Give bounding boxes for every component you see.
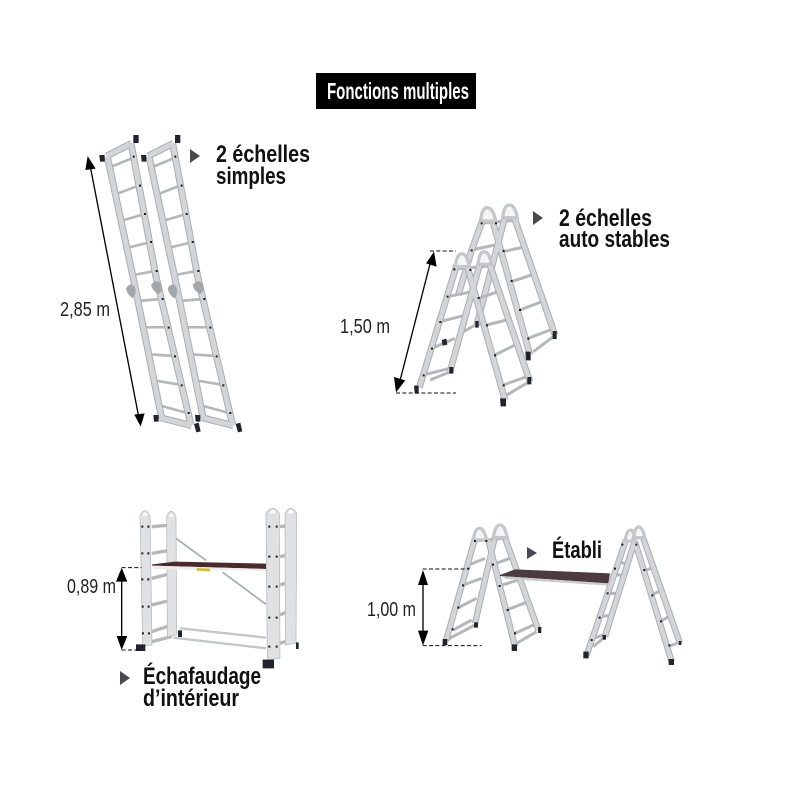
panel: échafaudage d'intérieur xyxy=(116,508,299,668)
panel: 2 échelles simples xyxy=(85,135,242,432)
dimension: 1,00 m: 1,00 m xyxy=(367,599,416,621)
dimension: 1,50 m: 1,50 m xyxy=(340,316,390,338)
label: 2 échelles auto stables xyxy=(533,205,670,253)
label: 2 échelles auto stables: 2 échelles xyxy=(559,205,652,232)
ladder one xyxy=(99,135,201,432)
icon: scaffold xyxy=(136,508,299,668)
arrow: height 2,85 m xyxy=(85,156,145,427)
label: Échafaudage d'intérieur: d’intérieur xyxy=(143,685,239,712)
label: Échafaudage d'intérieur xyxy=(120,662,261,712)
label: Établi xyxy=(527,536,602,564)
label: 2 échelles simples: simples xyxy=(216,163,286,190)
icon: back A-frame ladder xyxy=(458,205,557,360)
icon: right A-frame ladder xyxy=(583,527,681,665)
label: 2 échelles auto stables: auto stables xyxy=(559,226,670,253)
icon: left A-frame ladder xyxy=(443,525,541,651)
title xyxy=(316,73,476,109)
panel: établi xyxy=(418,525,681,665)
arrow: height 1,00 m xyxy=(418,569,482,646)
ladder two xyxy=(141,135,242,432)
label: Établi: Établi xyxy=(552,536,602,564)
title: Fonctions multiples xyxy=(327,78,469,104)
arrow: height 1,50 m xyxy=(394,251,456,393)
icon: ladder pair, straight xyxy=(99,135,242,432)
label: Échafaudage d'intérieur: Échafaudage xyxy=(143,662,261,690)
label: 2 échelles simples xyxy=(190,141,310,190)
icon: platform xyxy=(500,569,610,586)
arrow: height 0,89 m xyxy=(116,568,142,650)
panel: 2 échelles auto stables xyxy=(394,205,557,406)
icon: front A-frame ladder xyxy=(414,252,531,406)
dimension: 2,85 m: 2,85 m xyxy=(60,299,110,321)
dimension: 0,89 m: 0,89 m xyxy=(67,576,116,598)
label: 2 échelles simples: 2 échelles xyxy=(216,141,310,168)
